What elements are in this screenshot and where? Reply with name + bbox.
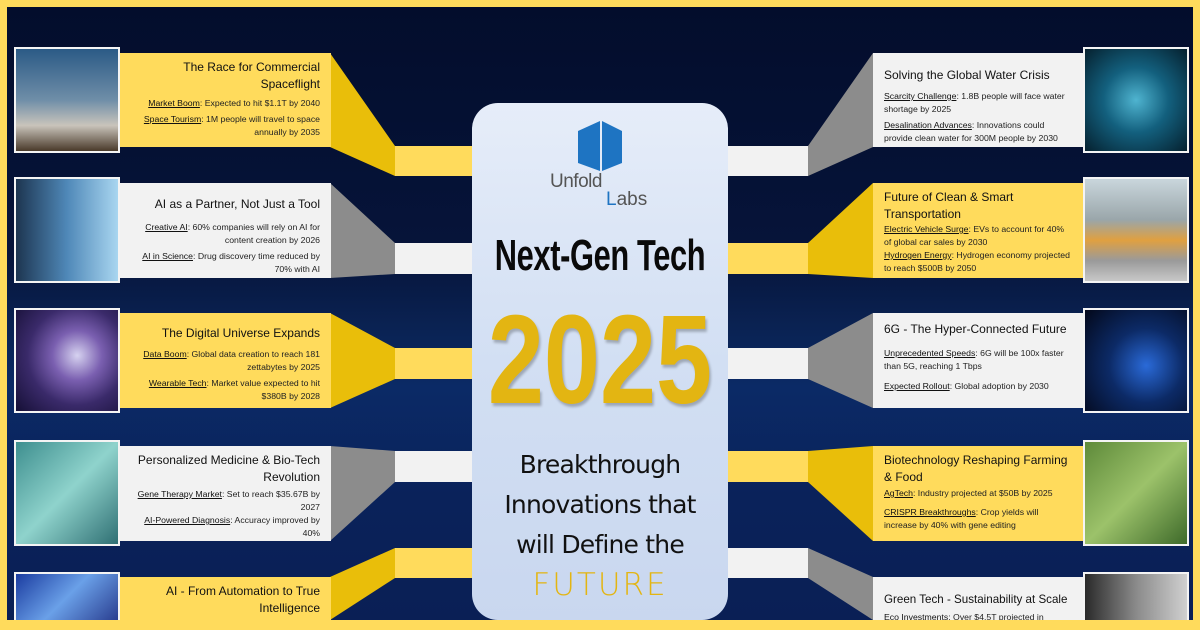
image: water	[1083, 47, 1189, 153]
panel: transportation	[873, 183, 1084, 278]
panel: AI partner: Creative AI: 60% companies will rely on AI for content creation by 2026	[145, 222, 320, 245]
panel: 6G: 6G - The Hyper-Connected Future	[884, 322, 1067, 336]
subtitle: Breakthrough	[520, 450, 680, 479]
panel: commercial spaceflight: The Race for Commercial Spaceflight	[183, 60, 320, 91]
panel: personalized medicine: AI-Powered Diagnosis: Accuracy improved by 40%	[144, 515, 320, 538]
image: DNA	[14, 440, 120, 546]
logo	[550, 121, 647, 210]
panel: commercial spaceflight: Space Tourism: 1M people will travel to space annually by 2035	[144, 114, 320, 137]
panel: commercial spaceflight	[120, 53, 331, 147]
image: tram	[1083, 177, 1189, 283]
image: robot	[14, 572, 120, 622]
panel: biotech farming: Biotechnology Reshaping Farming & Food	[884, 453, 1067, 484]
panel: transportation: Future of Clean & Smart Transportation	[884, 190, 1013, 221]
image: AI	[14, 177, 120, 283]
subtitle: Innovations that	[504, 490, 696, 519]
panel: personalized medicine	[120, 446, 331, 541]
panel: biotech farming: AgTech: Industry projected at $50B by 2025	[884, 488, 1053, 498]
panel: digital universe: Data Boom: Global data creation to reach 181 zettabytes by 2025	[143, 349, 320, 372]
future: FUTURE	[532, 567, 668, 603]
panel: biotech farming: CRISPR Breakthroughs: Crop yields will increase by 40% with gene editing	[884, 507, 1039, 530]
panel: AI automation: AI - From Automation to True Intelligence	[166, 584, 320, 615]
panel: green tech	[873, 577, 1084, 620]
panel: commercial spaceflight: Market Boom: Expected to hit $1.1T by 2040	[148, 98, 320, 108]
panel: AI partner	[120, 183, 331, 278]
panel: AI partner: AI as a Partner, Not Just a Tool	[155, 197, 320, 211]
image: 6G	[1083, 308, 1189, 413]
year 2025: 2025	[488, 289, 712, 430]
panel: transportation: Electric Vehicle Surge: EVs to account for 40% of global car sales by 2030	[884, 224, 1064, 247]
subtitle	[504, 450, 696, 559]
logo: Unfold	[550, 171, 602, 192]
center card	[472, 103, 728, 620]
panel: digital universe: Wearable Tech: Market value expected to hit $380B by 2028	[149, 378, 320, 401]
panel: water crisis: Solving the Global Water Crisis	[884, 68, 1050, 82]
panel: digital universe: The Digital Universe Expands	[162, 326, 320, 340]
image: plant	[1083, 572, 1189, 622]
logo: Labs	[606, 189, 647, 210]
panel: digital universe	[120, 313, 331, 408]
image: farming	[1083, 440, 1189, 546]
image: rocket	[14, 47, 120, 153]
subtitle: will Define the	[516, 530, 684, 559]
panel: 6G	[873, 313, 1084, 408]
panel: 6G: Expected Rollout: Global adoption by 2030	[884, 381, 1049, 391]
panel: 6G: Unprecedented Speeds: 6G will be 100x faster than 5G, reaching 1 Tbps	[884, 348, 1064, 371]
panel: water crisis: Scarcity Challenge: 1.8B people will face water shortage by 2025	[884, 91, 1065, 114]
panel: personalized medicine: Gene Therapy Market: Set to reach $35.67B by 2027	[138, 489, 320, 512]
panel: green tech: Green Tech - Sustainability at Scale	[884, 593, 1067, 606]
image: galaxy	[14, 308, 120, 413]
panel: AI automation	[120, 577, 331, 620]
panel: biotech farming	[873, 446, 1084, 541]
title: Next-Gen Tech	[495, 231, 705, 280]
panel: transportation: Hydrogen Energy: Hydrogen economy projected to reach $500B by 2050	[884, 250, 1070, 273]
panel: water crisis: Desalination Advances: Innovations could provide clean water for 300M people by 2030	[884, 120, 1058, 143]
panel: water crisis	[873, 53, 1084, 147]
panel: personalized medicine: Personalized Medicine & Bio-Tech Revolution	[138, 453, 320, 484]
panel: AI partner: AI in Science: Drug discovery time reduced by 70% with AI	[142, 251, 320, 274]
